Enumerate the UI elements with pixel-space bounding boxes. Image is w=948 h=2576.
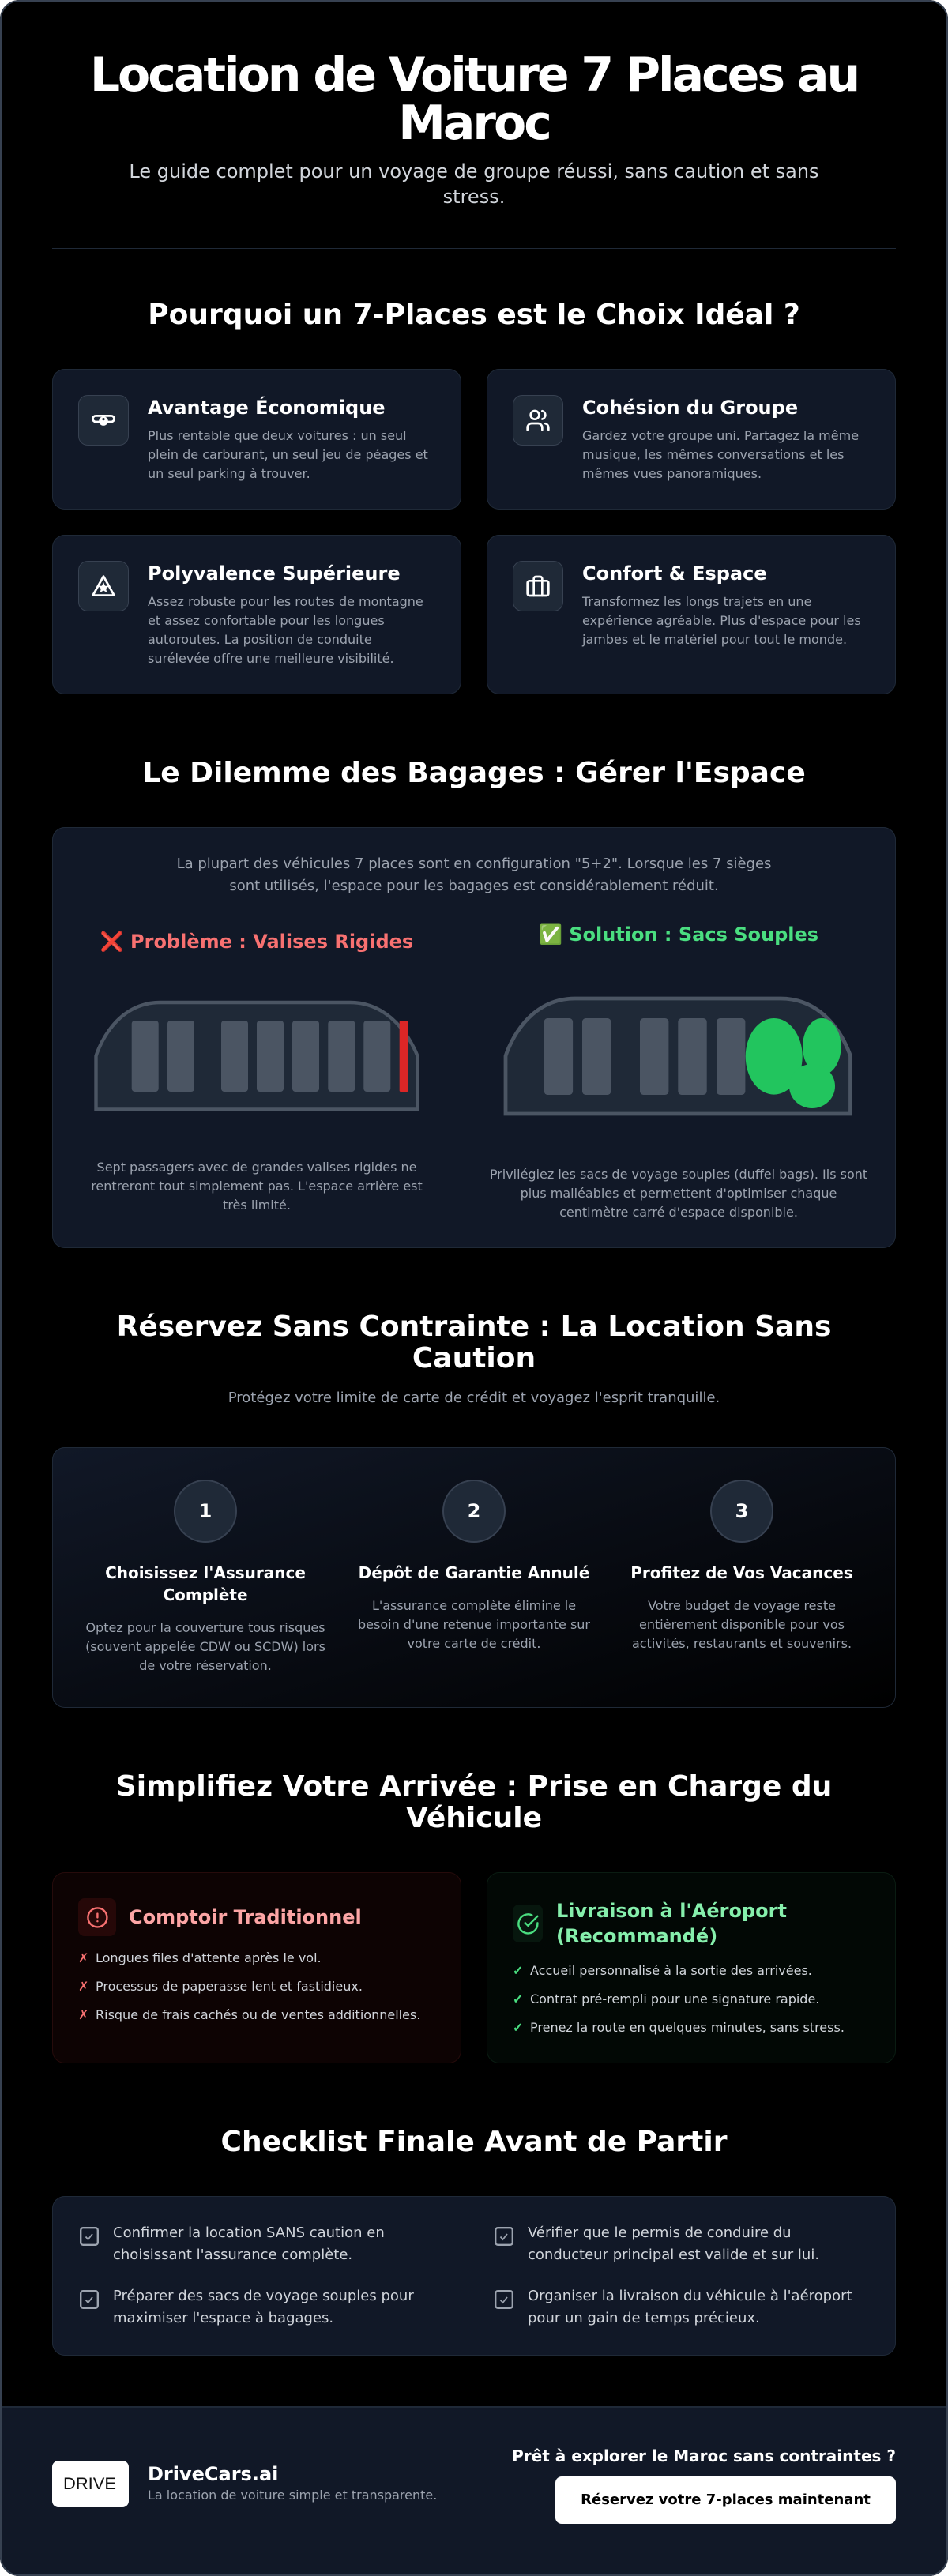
solution heading: ✅ Solution : Sacs Souples bbox=[539, 923, 818, 946]
card text bbox=[582, 428, 859, 481]
solution text: plus malléables et permettent d'optimiser chaque bbox=[521, 1186, 837, 1201]
panel title: (Recommandé) bbox=[556, 1925, 717, 1947]
panel: confort et espace bbox=[487, 535, 896, 694]
card text: Plus rentable que deux voitures : un seul bbox=[148, 428, 407, 443]
card text: autoroutes. La position de conduite bbox=[148, 632, 372, 647]
panel: livraison aéroport bbox=[487, 1872, 896, 2063]
heading: sans caution bbox=[117, 1311, 831, 1374]
card text: jambes et le matériel pour tout le monde. bbox=[582, 632, 847, 647]
card title: Confort & Espace bbox=[582, 562, 767, 585]
icon: triangle star bbox=[78, 561, 129, 611]
list item: Contrat pré-rempli pour une signature rapide. bbox=[530, 1991, 819, 2006]
chart: car with soft bags bbox=[504, 997, 852, 1115]
step 1 text: Optez pour la couverture tous risques bbox=[85, 1620, 325, 1635]
list item: Risque de frais cachés ou de ventes additionnelles. bbox=[96, 2007, 420, 2022]
checklist item: Organiser la livraison du véhicule à l'aéroport bbox=[528, 2288, 852, 2304]
solution text: Privilégiez les sacs de voyage souples (duffel bags). Ils sont bbox=[490, 1167, 867, 1182]
subtitle bbox=[129, 160, 819, 208]
panel title: Comptoir Traditionnel bbox=[129, 1906, 362, 1928]
card text: un seul parking à trouver. bbox=[148, 466, 310, 481]
heading: pourquoi: Pourquoi un 7-Places est le Choix Idéal ? bbox=[148, 299, 800, 331]
step 1 bbox=[85, 1480, 325, 1673]
heading: arrivée bbox=[116, 1770, 832, 1834]
step 1 text: de votre réservation. bbox=[139, 1658, 272, 1673]
step 3 text: activités, restaurants et souvenirs. bbox=[632, 1636, 852, 1651]
card title: Cohésion du Groupe bbox=[582, 397, 798, 419]
section subtitle: Protégez votre limite de carte de crédit et voyagez l'esprit tranquille. bbox=[228, 1390, 720, 1406]
step number 3 bbox=[710, 1480, 773, 1543]
panel: cohésion du groupe bbox=[487, 369, 896, 510]
icon: users bbox=[513, 395, 563, 446]
checklist item: Vérifier que le permis de conduire du bbox=[528, 2224, 792, 2241]
list item: Processus de paperasse lent et fastidieux. bbox=[96, 1979, 363, 1994]
panel: avantage économique bbox=[52, 369, 461, 510]
step number 1: 1 bbox=[199, 1500, 212, 1522]
step number 3: 3 bbox=[735, 1500, 748, 1522]
step 2 text: L'assurance complète élimine le bbox=[372, 1598, 576, 1613]
icon: coins bbox=[78, 395, 129, 446]
subtitle: stress. bbox=[443, 186, 505, 208]
checklist item: Préparer des sacs de voyage souples pour bbox=[113, 2288, 414, 2304]
card title: Polyvalence Supérieure bbox=[148, 562, 401, 585]
chart: car with rigid suitcases bbox=[94, 1000, 419, 1111]
card text: plein de carburant, un seul jeu de péages et bbox=[148, 447, 428, 462]
checklist item bbox=[80, 2285, 459, 2330]
step 3 bbox=[630, 1480, 853, 1651]
step 1 text bbox=[85, 1620, 325, 1673]
card text bbox=[581, 594, 861, 647]
card text: Assez robuste pour les routes de montagne bbox=[148, 594, 423, 609]
list item: ✗ bbox=[78, 1950, 88, 1965]
call to action button: Réservez votre 7-places maintenant bbox=[581, 2491, 871, 2508]
heading: bagages: Le Dilemme des Bagages : Gérer l'Espace bbox=[142, 757, 806, 789]
icon: briefcase bbox=[513, 561, 563, 611]
panel: checklist bbox=[52, 2196, 896, 2356]
brand name: DriveCars.ai bbox=[148, 2463, 278, 2485]
step 2 text bbox=[358, 1598, 590, 1651]
step number 2 bbox=[442, 1480, 506, 1543]
subtitle: Le guide complet pour un voyage de groupe réussi, sans caution et sans bbox=[129, 160, 819, 182]
heading: sans caution: Réservez Sans Contrainte : La Location Sans bbox=[117, 1311, 831, 1343]
list item: Prenez la route en quelques minutes, sans stress. bbox=[530, 2020, 845, 2035]
problem text: rentreront tout simplement pas. L'espace arrière est bbox=[91, 1179, 423, 1194]
intro text: sont utilisés, l'espace pour les bagages est considérablement réduit. bbox=[229, 878, 719, 894]
list item: Accueil personnalisé à la sortie des arrivées. bbox=[530, 1963, 812, 1978]
checklist item bbox=[80, 2224, 385, 2263]
problem text: Sept passagers avec de grandes valises rigides ne bbox=[97, 1160, 416, 1175]
step 3 text: entièrement disponible pour vos bbox=[639, 1617, 845, 1632]
card text bbox=[148, 428, 428, 481]
step 3 text bbox=[632, 1598, 852, 1651]
solution text bbox=[490, 1167, 867, 1220]
list item: ✓ bbox=[513, 2020, 523, 2035]
checklist item: conducteur principal est valide et sur lui. bbox=[528, 2247, 819, 2263]
checklist item: pour un gain de temps précieux. bbox=[528, 2310, 760, 2326]
call to action button bbox=[555, 2476, 896, 2524]
step 2 text: besoin d'une retenue importante sur bbox=[358, 1617, 590, 1632]
card text: Gardez votre groupe uni. Partagez la même bbox=[582, 428, 859, 443]
list item: ✓ bbox=[513, 1991, 523, 2006]
panel: comptoir traditionnel bbox=[52, 1872, 461, 2063]
list item: ✗ bbox=[78, 1979, 88, 1994]
panel title: Livraison à l'Aéroport bbox=[556, 1900, 787, 1922]
title: Location de Voiture 7 Places au bbox=[90, 47, 858, 103]
title bbox=[90, 47, 858, 151]
solution text: centimètre carré d'espace disponible. bbox=[559, 1205, 798, 1220]
icon: alert bbox=[78, 1898, 116, 1936]
heading: checklist: Checklist Finale Avant de Partir bbox=[221, 2126, 727, 2158]
intro text bbox=[177, 856, 771, 894]
problem text bbox=[91, 1160, 423, 1213]
footer bbox=[0, 2406, 948, 2576]
list item: ✗ bbox=[78, 2007, 88, 2022]
card text bbox=[148, 594, 423, 666]
checklist item: maximiser l'espace à bagages. bbox=[113, 2310, 333, 2326]
checklist item: Confirmer la location SANS caution en bbox=[113, 2224, 385, 2241]
card text: et assez confortable pour les longues bbox=[148, 613, 385, 628]
list item: ✓ bbox=[513, 1963, 523, 1978]
step 2 title: Dépôt de Garantie Annulé bbox=[359, 1563, 589, 1582]
step 1 title: Choisissez l'Assurance bbox=[105, 1563, 306, 1582]
panel: polyvalence supérieure bbox=[52, 535, 461, 694]
step 1 title bbox=[105, 1563, 306, 1604]
card text: mêmes vues panoramiques. bbox=[582, 466, 762, 481]
checklist item bbox=[495, 2224, 819, 2263]
panel title bbox=[556, 1900, 787, 1947]
heading: arrivée: Simplifiez Votre Arrivée : Prise en Charge du bbox=[116, 1770, 832, 1803]
card text: expérience agréable. Plus d'espace pour les bbox=[582, 613, 861, 628]
card text: Transformez les longs trajets en une bbox=[582, 594, 811, 609]
step 1 text: (souvent appelée CDW ou SCDW) lors bbox=[85, 1639, 325, 1654]
checklist item bbox=[495, 2285, 874, 2330]
heading: sans caution: Caution bbox=[412, 1342, 536, 1374]
title: Maroc bbox=[398, 96, 550, 151]
card text: musique, les mêmes conversations et les bbox=[582, 447, 844, 462]
problem heading: ❌ Problème : Valises Rigides bbox=[100, 931, 413, 953]
panel: dilemme des bagages bbox=[52, 827, 896, 1248]
icon: check circle bbox=[513, 1905, 543, 1942]
card title: Avantage Économique bbox=[148, 397, 386, 419]
card text: surélevée offre une meilleure visibilité. bbox=[148, 651, 394, 666]
step 3 text: Votre budget de voyage reste bbox=[648, 1598, 836, 1613]
intro text: La plupart des véhicules 7 places sont en configuration "5+2". Lorsque les 7 sièges bbox=[177, 856, 771, 872]
logo bbox=[52, 2461, 129, 2507]
checklist item: choisissant l'assurance complète. bbox=[113, 2247, 352, 2263]
call to action text: Prêt à explorer le Maroc sans contraintes ? bbox=[512, 2446, 896, 2465]
heading: arrivée: Véhicule bbox=[406, 1802, 542, 1834]
step 3 title: Profitez de Vos Vacances bbox=[630, 1563, 853, 1582]
brand tagline: La location de voiture simple et transparente. bbox=[148, 2488, 437, 2503]
step 2 bbox=[358, 1480, 590, 1651]
panel: three steps bbox=[52, 1447, 896, 1708]
list item: Longues files d'attente après le vol. bbox=[96, 1950, 322, 1965]
problem text: très limité. bbox=[223, 1198, 291, 1213]
step number 2: 2 bbox=[468, 1500, 480, 1522]
step 2 text: votre carte de crédit. bbox=[408, 1636, 540, 1651]
step 1 title: Complète bbox=[163, 1585, 248, 1604]
step number 1 bbox=[174, 1480, 237, 1543]
